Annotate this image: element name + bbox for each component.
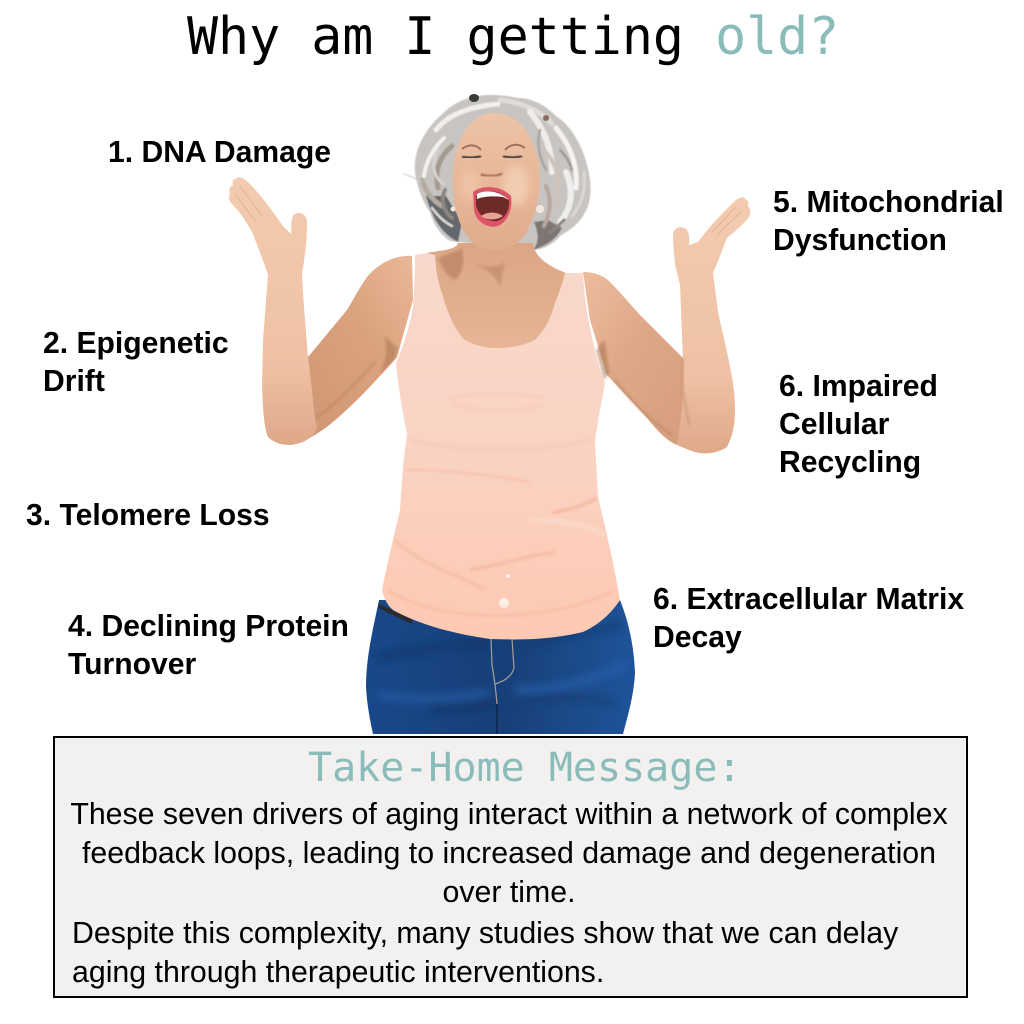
label: 2. Epigenetic Drift: Drift xyxy=(43,365,105,398)
label: 6. Impaired Cellular Recycling: Recycling xyxy=(779,446,921,479)
text block: second paragraph: aging through therapeutic interventions. xyxy=(72,956,604,989)
neck and chest xyxy=(420,243,575,360)
left forearm and hand xyxy=(229,177,317,445)
eyebrows and closed eyes xyxy=(462,145,525,150)
hair xyxy=(404,95,591,250)
hair clip xyxy=(469,94,549,121)
text block: first paragraph: These seven drivers of aging interact within a network of complex xyxy=(70,798,948,831)
face xyxy=(453,113,540,250)
label: 4. Declining Protein Turnover: 4. Declining Protein xyxy=(68,610,349,643)
label: 2. Epigenetic Drift xyxy=(43,327,229,398)
label: 4. Declining Protein Turnover xyxy=(68,610,349,681)
jeans xyxy=(366,600,635,734)
right upper arm and shoulder xyxy=(583,272,690,445)
armpit shadows xyxy=(312,336,672,435)
label: 5. Mitochondrial Dysfunction: Dysfunction xyxy=(773,224,947,257)
label: 6. Impaired Cellular Recycling xyxy=(779,370,938,479)
mouth xyxy=(473,187,511,227)
title: Why am I getting old? xyxy=(187,7,839,67)
shirt folds xyxy=(388,394,615,616)
label: 5. Mitochondrial Dysfunction xyxy=(773,186,1004,257)
earrings xyxy=(450,205,544,213)
label: 6. Impaired Cellular Recycling: Cellular xyxy=(779,408,889,441)
text block: first paragraph: over time. xyxy=(442,876,576,909)
text block: first paragraph xyxy=(70,798,948,909)
label: 4. Declining Protein Turnover: Turnover xyxy=(68,648,196,681)
label: 3. Telomere Loss: 3. Telomere Loss xyxy=(26,499,270,532)
tank top xyxy=(382,253,620,639)
label: 1. DNA Damage: 1. DNA Damage xyxy=(108,136,331,169)
text block: second paragraph: Despite this complexity, many studies show that we can delay xyxy=(72,917,898,950)
panel: take-home message xyxy=(53,736,968,998)
label: 2. Epigenetic Drift: 2. Epigenetic xyxy=(43,327,229,360)
text block: second paragraph xyxy=(72,917,898,989)
label: 6. Impaired Cellular Recycling: 6. Impaired xyxy=(779,370,938,403)
label: 6. Extracellular Matrix Decay: 6. Extracellular Matrix xyxy=(653,583,964,616)
text block: first paragraph: feedback loops, leading to increased damage and degeneration xyxy=(82,837,936,870)
right forearm and hand xyxy=(673,197,750,453)
label: 5. Mitochondrial Dysfunction: 5. Mitochondrial xyxy=(773,186,1004,219)
label: 6. Extracellular Matrix Decay: Decay xyxy=(653,621,742,654)
left upper arm and shoulder xyxy=(300,256,413,440)
label: 6. Extracellular Matrix Decay xyxy=(653,583,964,654)
panel heading: Take-Home Message: xyxy=(308,745,741,791)
nose xyxy=(481,173,502,176)
